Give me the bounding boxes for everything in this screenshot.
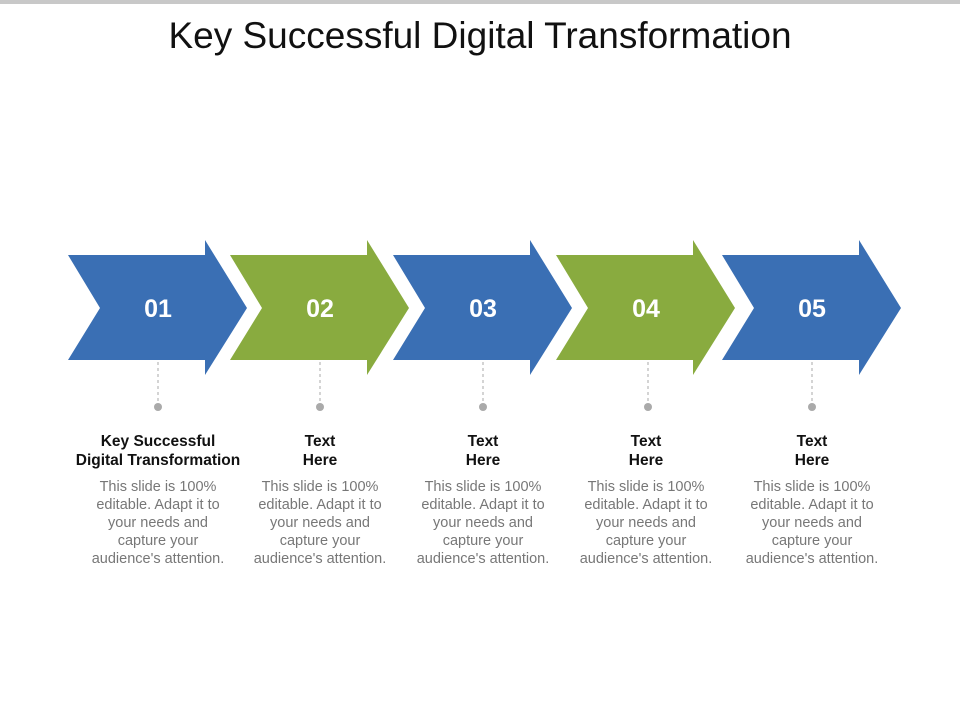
text block 1 [76,433,240,567]
text block 2: Text [305,433,335,450]
text block 2: This slide is 100% editable. Adapt it to your needs and capture your audience's attention. [254,479,386,567]
text block 5: Here [795,452,829,469]
arrow 03 [393,240,572,375]
text block 4: Text [631,433,661,450]
arrow 02 [230,240,409,375]
arrow 01 [68,240,247,375]
text block 3: Here [466,452,500,469]
arrow 02: 02 [306,295,334,323]
text block 4: Here [629,452,663,469]
text block 3: This slide is 100% editable. Adapt it to your needs and capture your audience's attention. [417,479,549,567]
arrow 04: 04 [632,295,660,323]
text block 3: Text [468,433,498,450]
text block 5: This slide is 100% editable. Adapt it to your needs and capture your audience's attention. [746,479,878,567]
text block 1: Digital Transformation [76,452,240,469]
text block 3 [417,433,549,567]
text block 4 [580,433,712,567]
text block 2 [254,433,386,567]
arrow 04 [556,240,735,375]
text block 1: Key Successful [101,433,215,450]
text block 5 [746,433,878,567]
arrow 05 [722,240,901,375]
arrow 01: 01 [144,295,172,323]
text block 1: This slide is 100% editable. Adapt it to your needs and capture your audience's attention. [92,479,224,567]
title: Key Successful Digital Transformation [168,15,792,56]
arrow 03: 03 [469,295,497,323]
text block 2: Here [303,452,337,469]
text block 5: Text [797,433,827,450]
text block 4: This slide is 100% editable. Adapt it to your needs and capture your audience's attention. [580,479,712,567]
arrow 05: 05 [798,295,826,323]
